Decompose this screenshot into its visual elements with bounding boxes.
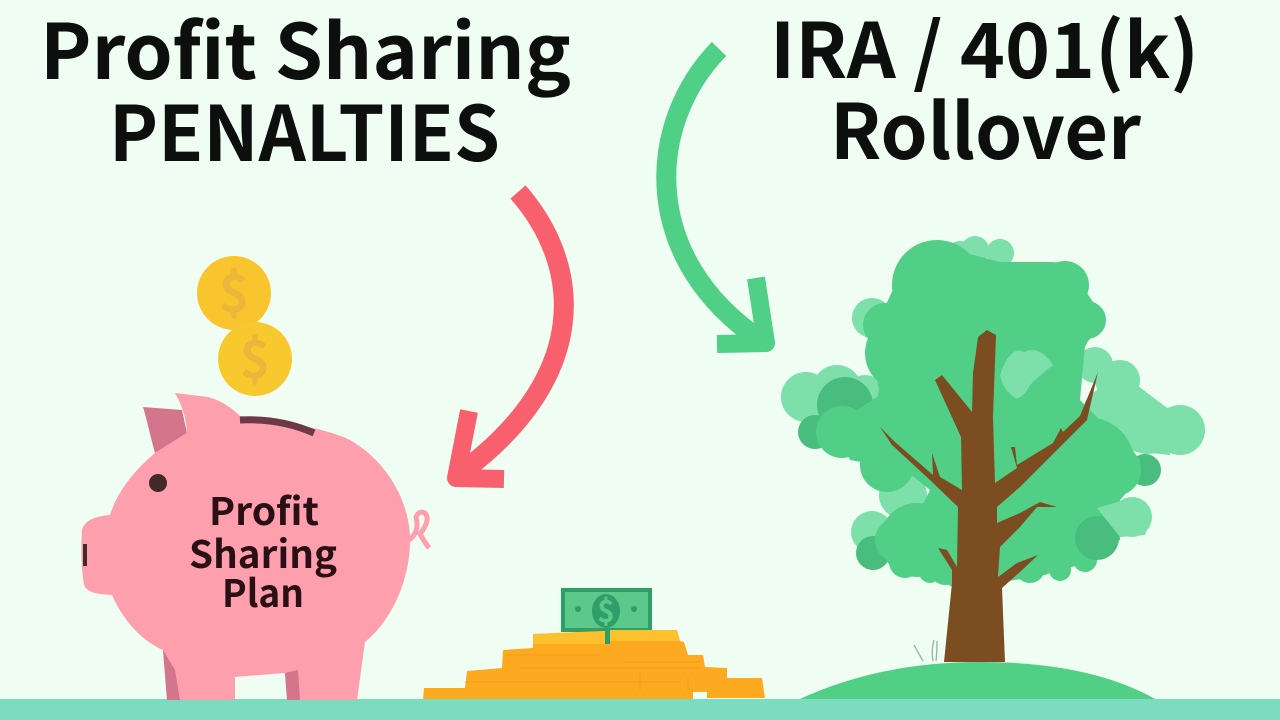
title: IRA / 401(k) Rollover [770,0,1199,181]
tree canopy [781,236,1205,587]
hill [800,662,1155,699]
dollar bill: $ [597,587,615,631]
illustration: gold bars and dollar bill [423,587,765,699]
light leaf patch, lower right [1097,497,1152,537]
arrow: red curved arrow to piggy bank [456,192,564,479]
arrow: green curved arrow to tree [666,49,766,344]
pig eye [149,474,167,492]
icon: gold coins: $ [219,252,249,327]
title: Profit Sharing Penalties: PENALTIES [109,73,500,183]
ground strip [0,699,1280,720]
pig label: Profit Sharing Plan [189,481,337,618]
dollar bill [561,587,652,644]
title: Profit Sharing Penalties [40,0,571,183]
illustration: piggy bank [81,393,429,700]
pig label: Profit Sharing Plan: Plan [222,563,304,618]
icon: gold coins [197,252,292,396]
illustration: tree on hill [781,236,1205,699]
pig label: Profit Sharing Plan: Profit [209,481,319,536]
icon: gold coins: $ [240,318,270,393]
pig label: Profit Sharing Plan: Sharing [189,524,337,579]
title: IRA / 401(k) Rollover: Rollover [830,71,1142,181]
tree trunk and branches [880,330,1098,662]
